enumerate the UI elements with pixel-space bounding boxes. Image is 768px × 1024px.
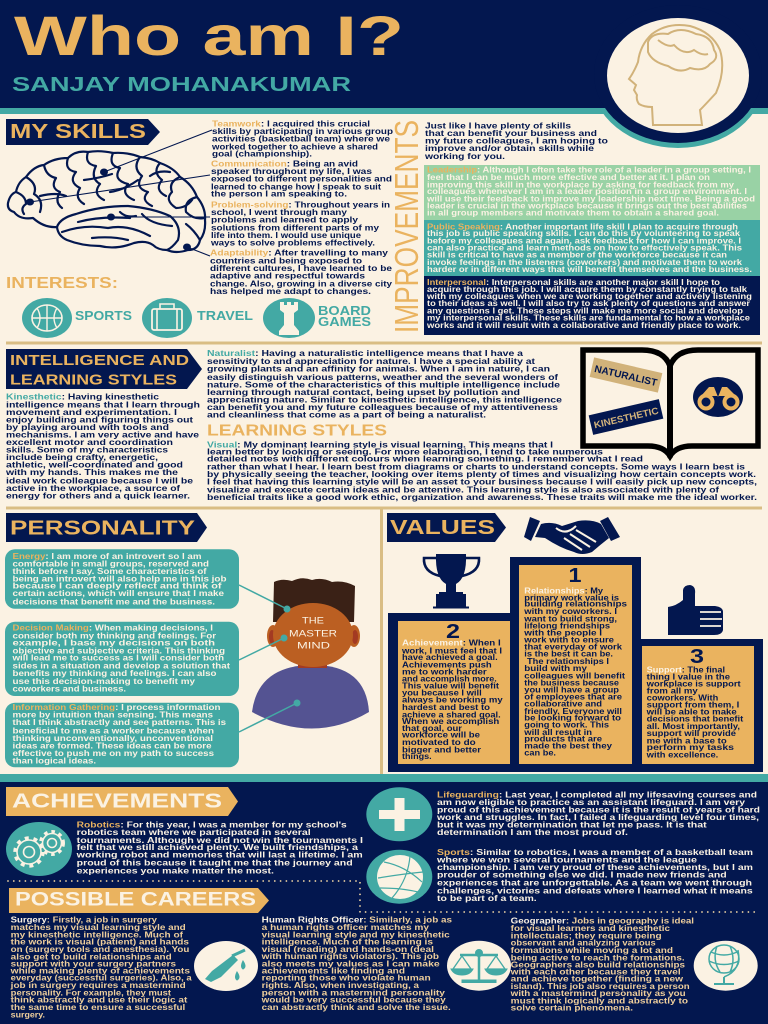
podium: rank 1 relationships: want to build strong,	[523, 615, 617, 624]
subtitle: name: SANJAY MOHANAKUMAR	[12, 74, 352, 96]
text: robotics: tournaments. Although we did not win the tournaments I	[77, 836, 363, 845]
title: Who am I?	[14, 4, 404, 67]
text: sports achievement: championship. I am very proud of these achievements, but I am	[437, 863, 753, 872]
panel: energy: because I can deeply reflect and think of	[12, 582, 222, 591]
icon: plus sign	[366, 787, 432, 841]
banner: intelligence and learning styles	[6, 349, 202, 389]
podium: rank 2 achievement: have achieved a goal.	[402, 653, 498, 662]
text: human rights officer career: rights. Also, when investigating, a	[262, 981, 420, 990]
text: surgery career: while making plenty of achievements	[9, 967, 191, 976]
text: improvements intro: Just like I have plenty of skills	[425, 121, 572, 130]
text: problem-solving skill: school, I went through many	[211, 208, 348, 217]
text: geographer career: Geographers also build relationships	[511, 960, 686, 969]
text: geographer career: solve certain phenomena.	[511, 1004, 633, 1013]
podium: rank 2 achievement: hardest and best to	[402, 703, 490, 712]
panel: interpersonal: any questions I get. These steps will make me more social and develop	[427, 306, 743, 315]
podium: rank 1 relationships: you will have a group	[524, 686, 619, 695]
text: kinesthetic	[5, 392, 200, 500]
panel: public speaking	[424, 220, 760, 276]
text: problem-solving skill: life into them. I would use unique	[211, 231, 362, 240]
text: kinesthetic: by playing around with tools and	[6, 423, 169, 432]
panel: interpersonal: Interpersonal : Interpersonal skills are another major skill I hope to	[427, 278, 720, 287]
text: naturalist: can benefit you and my future colleagues because of my attentiveness	[207, 403, 559, 412]
text: sports achievement: where we won several tournaments and the league	[436, 855, 698, 864]
text: geographer career: being active to reach the formations.	[511, 953, 685, 962]
text: human rights officer career: Human Rights Officer : Similarly, a job as	[262, 915, 453, 924]
panel: information gathering: effective to push me on my path to success	[12, 749, 215, 758]
podium: rank 1 relationships: made the best they	[524, 742, 613, 751]
text: adaptability skill: Adaptability : After travelling to many	[210, 249, 389, 258]
text: robotics: Robotics : For this year, I was a member for my school's	[77, 821, 347, 830]
text: surgery career: my kinesthetic intelligence. Much of	[11, 930, 183, 939]
panel: leadership: will use their feedback to improve my leadership next time. Being a good	[426, 194, 755, 203]
text: geographer career	[509, 916, 694, 1013]
text: visual: beneficial traits like a good work ethic, organization and awareness. These traits will make me the ideal worker.	[207, 493, 757, 502]
podium: rank 1 relationships	[510, 557, 641, 772]
icon: syringe	[194, 941, 258, 991]
podium: rank 3 support: perform my tasks	[647, 743, 735, 752]
podium: rank 1 relationships: of employees that are	[524, 692, 623, 701]
podium: rank 1 relationships: products that are	[524, 735, 603, 744]
podium: rank 3 support: thing I value in the	[647, 672, 731, 681]
podium: rank 2 achievement: work, I must feel that I	[401, 646, 502, 655]
text: improvements intro	[424, 121, 608, 161]
text: improvements intro: working for you.	[424, 152, 505, 161]
label tag: naturalist	[590, 357, 662, 393]
podium: rank 1 relationships: the business because	[524, 679, 620, 688]
interest: board games	[263, 298, 371, 338]
heading: interests: INTERESTS:	[6, 275, 118, 292]
podium: rank 2 achievement: When we accomplish	[402, 717, 499, 726]
panel: interpersonal: my interpersonal skills. These skills are fundamental to how a workplace	[427, 314, 751, 323]
podium: rank 1 relationships: Relationships : My	[524, 586, 604, 595]
banner: intelligence and learning styles: LEARNING STYLES	[10, 371, 177, 388]
label tag: kinesthetic: KINESTHETIC	[593, 406, 660, 431]
banner: values: VALUES	[390, 517, 495, 539]
text: naturalist	[207, 349, 563, 419]
text: visual: visualize and execute certain ideas and be attentive. This learning style is also associated with plenty of	[207, 485, 719, 494]
connector lines to figure	[239, 585, 300, 732]
text: visual: Visual : My dominant learning style is visual learning. This means that I	[207, 440, 553, 449]
text: surgery career: also get to build relationships and	[11, 952, 172, 961]
text: geographer career: formations while moving a lot and	[511, 946, 673, 955]
text: communication skill: Communication : Being an avid	[211, 160, 358, 169]
interest: board games: GAMES	[318, 314, 371, 329]
panel: energy: certain actions, which will ensure that I make	[12, 589, 225, 598]
podium: rank 1 relationships: be looking forward to	[524, 714, 621, 723]
panel: information gathering: than logical ideas.	[12, 756, 96, 765]
bottom navy section	[0, 774, 768, 1024]
brain illustration with pointer lines	[8, 130, 212, 256]
podium: rank 1 relationships: work with to ensure	[523, 636, 615, 645]
podium: rank 1 relationships: will all result in	[523, 728, 592, 737]
podium: rank 1 relationships: build with my	[524, 664, 588, 673]
text: surgery career	[9, 915, 192, 1019]
text: geographer career: for visual learners and kinesthetic	[511, 924, 671, 933]
text: teamwork skill: worked together to achieve a shared	[211, 142, 378, 151]
text: communication skill: exposed to different personalities and	[211, 175, 392, 184]
text: surgery career: Surgery : Firstly, a job in surgery	[11, 915, 158, 924]
panel: energy: being an introvert will also help me in this job	[12, 574, 227, 583]
icon: gears	[6, 822, 72, 876]
interest: sports	[22, 298, 132, 338]
text: surgery career: the work is visual (patient) and hands	[11, 938, 190, 947]
icon: thumbs up	[668, 585, 723, 635]
text: adaptability skill: change. Also, growing in a diverse city	[210, 280, 393, 289]
icon: basketball	[366, 850, 432, 904]
text: problem-solving skill: problems and learned to apply	[211, 216, 359, 225]
text: problem-solving skill: Problem-solving : Throughout years in	[211, 200, 390, 210]
panel: public speaking: Public Speaking : Another important life skill I plan to acquire through	[427, 222, 738, 231]
podium: rank 1 relationships: that everyday of work	[524, 642, 623, 651]
panel: decision making: use this decision-making to benefit my	[12, 677, 196, 686]
text: geographer career: Geographer : Jobs in geography is ideal	[511, 916, 694, 925]
icon: open book with labels	[583, 350, 758, 456]
text: problem-solving skill	[210, 200, 390, 248]
podium: rank 1 relationships: can be.	[524, 749, 556, 758]
banner: achievements	[6, 787, 238, 816]
text: geographer career: intellectuals; they require being	[511, 931, 662, 940]
panel: information gathering: more by intuition than sensing. This means	[12, 711, 214, 720]
illustration: mastermind figure: MASTER	[289, 629, 337, 640]
podium: rank 1 relationships: The relationships I	[527, 657, 609, 666]
text: human rights officer career: achievements like finding and	[262, 967, 405, 976]
panel: leadership: improving this skill in the workplace by asking for feedback from my	[427, 180, 735, 189]
podium: rank 3 support: decisions that benefit	[647, 715, 744, 724]
text: lifeguarding: determination I am the most proud of.	[437, 828, 628, 837]
text: human rights officer career: also meets my values as I can make	[262, 959, 440, 968]
text: naturalist: learning through natural contact, being upset by pollution and	[207, 388, 520, 397]
panel: information gathering: ideas are formed. These ideas can be more	[12, 741, 212, 750]
panel: public speaking: before my colleagues and again, ask feedback for how I can improve. I	[427, 236, 741, 245]
text: sports achievement	[436, 848, 753, 903]
text: human rights officer career: would be very successful because they	[260, 996, 446, 1005]
podium: rank 3 support: Support : The final	[647, 665, 725, 674]
podium: rank 2 achievement: things.	[402, 752, 432, 761]
text: teamwork skill: goal (championship).	[212, 150, 312, 159]
text: visual: detailed notes with different colours when learning something. I remember what I read	[207, 455, 643, 464]
text: naturalist: appreciating nature. Similar to kinesthetic intelligence, this intelligence	[207, 396, 563, 405]
text: communication skill	[211, 160, 392, 199]
podium: rank 1 relationships: is the best it can be.	[524, 650, 613, 659]
text: naturalist: Naturalist : Having a naturalistic intelligence means that I have a	[207, 349, 524, 358]
panel: decision making: coworkers and business.	[12, 685, 126, 694]
podium: rank 2 achievement: Achievement : When I	[402, 639, 501, 648]
panel: decision making: Decision Making : When making decisions, I	[12, 624, 213, 633]
text: geographer career: with each other because they travel	[509, 967, 681, 976]
panel: leadership: feel that I can be much more effective and better at it. I plan on	[427, 173, 710, 182]
text: surgery career: support with your surgery partners	[11, 959, 177, 968]
podium: rank 2 achievement: me to work harder	[402, 667, 487, 676]
text: visual: by physically seeing the teacher, looking over items plenty of times and visualizing how certain concepts work.	[207, 470, 756, 479]
text: human rights officer career: reporting those who violate human	[262, 974, 431, 983]
text: improvements intro: improve and/or obtain skills while	[425, 144, 595, 153]
text: human rights officer career: a human rights officer matches my	[262, 923, 430, 932]
panel: interpersonal: acquire through this job. I will acquire them by constantly trying to talk	[427, 285, 748, 294]
panel: information gathering	[5, 703, 239, 767]
text: lifeguarding: am now eligible to practice as an assistant lifeguard. I am very	[437, 798, 746, 807]
panel: energy	[5, 549, 239, 609]
podium: rank 3 support	[641, 639, 763, 772]
text: adaptability skill	[210, 249, 393, 296]
panel: leadership	[424, 165, 760, 220]
podium: rank 2 achievement: This value will benefit	[402, 681, 499, 690]
text: kinesthetic: excellent motor and coordination	[6, 438, 173, 447]
text: sports achievement: prouder of something else we did. I made new friends and	[437, 871, 727, 880]
text: surgery career: think abstractly and use their logic at	[11, 996, 188, 1005]
illustration: mastermind figure: THE	[302, 615, 324, 626]
text: lifeguarding	[436, 791, 760, 837]
podium: rank 2 achievement: bigger and better	[402, 745, 481, 754]
label tag: kinesthetic	[589, 399, 663, 435]
text: human rights officer career: person with a mastermind personality	[262, 988, 446, 997]
interest: travel	[142, 298, 253, 338]
text: geographer career: island). This job also requires a person	[511, 982, 690, 991]
text: surgery career: surgery.	[11, 1010, 45, 1019]
text: visual: I feel that having this learning style will be an asset to your business because I will easily pick up new concepts,	[207, 477, 757, 486]
podium: rank 1 relationships: with my coworkers. I	[523, 607, 617, 616]
text: naturalist: easily distinguish various patterns, weather and the several wonders of	[207, 373, 558, 382]
text: human rights officer career	[260, 915, 453, 1012]
text: kinesthetic: active in the workplace, a source of	[6, 484, 180, 493]
text: surgery career: matches my visual learning style and	[11, 923, 186, 932]
podium: rank 3 support: with excellence.	[646, 750, 718, 759]
podium: rank 3 support: coworkers. With	[647, 694, 718, 703]
podium: rank 3 support: me with a base to	[647, 736, 727, 745]
podium: rank 2 achievement: you because I will	[402, 689, 482, 698]
icon: binoculars badge	[693, 377, 743, 417]
illustration: mastermind figure: MIND	[297, 641, 330, 652]
banner: intelligence and learning styles: INTELLIGENCE AND	[10, 352, 189, 369]
panel: decision making: example, I base my decisions on both	[12, 639, 215, 648]
text: human rights officer career: with human rights violators). This job	[260, 952, 439, 961]
panel: public speaking: this job is public speaking skills. I can do this by volunteering to speak	[427, 229, 741, 238]
text: naturalist: and cleanliness that come as a part of being a naturalist.	[207, 410, 486, 419]
text: naturalist: sensitivity to and appreciation for nature. I have a special ability at	[207, 357, 535, 366]
text: sports achievement: experiences that are unforgettable. As a team we went through	[437, 879, 752, 888]
banner: personality	[6, 513, 207, 542]
podium: rank 2 achievement: 2	[446, 621, 460, 643]
text: kinesthetic: movement and experimentation. I	[6, 408, 177, 417]
panel: energy: Energy : I am more of an introvert so I am	[12, 552, 202, 561]
panel: interpersonal: with my colleagues when we are working together and actively listening	[426, 292, 752, 301]
podium: rank 1 relationships: going to work. This	[524, 721, 610, 730]
illustration: mastermind figure	[252, 578, 369, 728]
text: sports achievement: Sports : Similar to robotics, I was a member of a basketball team	[437, 848, 753, 857]
text: surgery career: job in surgery requires a mastermind	[9, 981, 186, 990]
text: teamwork skill: Teamwork : I acquired this crucial	[212, 120, 370, 129]
heading: learning styles: LEARNING STYLES	[207, 423, 387, 440]
text: lifeguarding: work and struggles. In fact, I failed a lifeguarding level four times,	[436, 813, 759, 822]
interest: board games: BOARD	[318, 303, 371, 318]
podium: rank 2 achievement: motivated to do	[402, 738, 476, 747]
text: human rights officer career: visual learning style and my kinesthetic	[262, 930, 450, 939]
podium: rank 3 support: 3	[690, 646, 704, 668]
panel: energy: comfortable in small groups, reserved and	[12, 560, 209, 569]
interest: sports: SPORTS	[75, 308, 132, 323]
text: kinesthetic: energy for others and a quick learner.	[6, 491, 190, 500]
panel: public speaking: can also practice and learn methods on how to effectively speak. This	[427, 244, 743, 253]
panel: interpersonal	[424, 276, 760, 335]
podium: rank 3 support: will be able to make	[646, 707, 737, 716]
icon: trophy	[424, 554, 479, 608]
text: teamwork skill: skills by participating in various group	[212, 127, 393, 136]
panel: energy: decisions that benefit me and the business.	[12, 597, 215, 606]
text: adaptability skill: different cultures, I have learned to be	[210, 264, 393, 273]
podium: rank 1 relationships: with the people I	[523, 629, 602, 638]
interest: travel: TRAVEL	[197, 308, 253, 323]
icon: scales of justice	[447, 941, 511, 991]
panel: public speaking: skill is critical to have as a member of the workforce because it can	[427, 250, 727, 259]
text: communication skill: speaker throughout my life, I was	[211, 167, 373, 176]
text: visual	[207, 440, 757, 502]
label tag: naturalist: NATURALIST	[593, 364, 658, 389]
podium: rank 2 achievement: workforce will be	[401, 731, 481, 740]
panel: information gathering: beneficial to me as a worker because when	[12, 726, 214, 735]
text: sports achievement: to be part of a team.	[437, 894, 537, 903]
podium: rank 3 support: from all my	[647, 686, 698, 695]
podium: rank 1 relationships: collaborative and	[524, 700, 602, 709]
header band	[0, 0, 768, 148]
text: kinesthetic: include being crafty, energetic,	[6, 453, 158, 462]
icon: globe	[694, 941, 758, 991]
podium: rank 3 support: workplace is support	[646, 680, 741, 689]
panel: public speaking: harder or in different ways that will benefit themselves and the business.	[427, 265, 752, 274]
podium: rank 2 achievement	[388, 613, 510, 772]
text: kinesthetic: ideal work colleague because I will be	[6, 476, 194, 485]
podium: rank 3 support: support from them, I	[647, 701, 739, 710]
panel: information gathering: that I think abstractly and see patterns. This is	[12, 718, 227, 727]
text: communication skill: the person I am speaking to.	[211, 190, 347, 199]
text: visual: rather than what I hear. I learn best from diagrams or charts to understand concepts. Some ways I learn best is	[207, 462, 746, 471]
podium: rank 1 relationships: lifelong friendships	[524, 621, 611, 630]
text: robotics: working robot and memories that will last a lifetime. I am	[75, 851, 363, 860]
text: kinesthetic: mechanisms. I am very active and have	[6, 430, 200, 439]
text: geographer career: must think logically and abstractly to	[511, 996, 688, 1005]
podium: rank 2 achievement: achieve a shared goal.	[402, 710, 501, 719]
icon: head with brain	[607, 18, 749, 133]
panel: information gathering: Information Gathering : I process information	[12, 703, 221, 712]
text: adaptability skill: countries and being exposed to	[210, 256, 362, 265]
panel: interpersonal: works and it will result with a collaborative and friendly place to work.	[426, 321, 741, 330]
podium: rank 1 relationships: colleagues will benefit	[524, 671, 625, 680]
podium: rank 2 achievement: Achievements push	[402, 660, 492, 669]
text: kinesthetic: Kinesthetic : Having kinesthetic	[6, 392, 160, 401]
text: lifeguarding: proud of this achievement because it is the result of years of hard	[437, 805, 760, 814]
text: lifeguarding: but it was my determination that let me pass. It is that	[437, 821, 707, 830]
text: lifeguarding: Lifeguarding : Last year, I completed all my lifesaving courses and	[437, 791, 757, 800]
podium: rank 1 relationships: primary work value is	[524, 594, 620, 603]
text: improvements intro: my future colleagues, I am hoping to	[425, 136, 608, 145]
text: teamwork skill: activities (basketball team) where we	[212, 134, 391, 143]
heading: improvements (vertical): IMPROVEMENTS	[388, 120, 425, 333]
text: naturalist: nature. Some of the characteristics of this multiple intelligence include	[207, 380, 561, 389]
text: geographer career: and achieve together (finding a new	[511, 975, 684, 984]
text: geographer career: observant and analyzing various	[511, 939, 656, 948]
panel: leadership: in all group members and motivate them to obtain a shared goal.	[427, 209, 719, 218]
text: robotics: experiences you make matter the most.	[77, 866, 274, 875]
text: robotics	[75, 821, 363, 875]
panel: decision making: consider both my thinking and feelings. For	[12, 631, 216, 640]
panel: decision making: sides in a situation and develop a solution that	[12, 662, 230, 671]
text: kinesthetic: intelligence means that I learn through	[6, 400, 200, 409]
text: surgery career: on (surgery tools and anesthesia). You	[11, 945, 189, 954]
panel: decision making: will lead me to success as I will consider both	[11, 654, 224, 663]
text: adaptability skill: has helped me adapt to changes.	[210, 287, 371, 296]
podium: rank 2 achievement: always be working my	[402, 696, 503, 705]
dotted separator	[8, 881, 756, 912]
podium: rank 2 achievement: that goal, our	[402, 724, 462, 733]
text: visual: learn better by looking or seeing. For more elaboration, I tend to take numerous	[207, 447, 604, 456]
banner: achievements: ACHIEVEMENTS	[12, 791, 222, 813]
panel: public speaking: invoke feelings in the listeners (coworkers) and motivate them to work	[427, 258, 743, 267]
podium: rank 3 support: support will provide	[647, 729, 737, 738]
banner: my skills	[6, 119, 160, 145]
panel: leadership: Leadership : Although I often take the role of a leader in a group setting, I	[427, 166, 751, 175]
text: surgery career: the same time to ensure a successful	[11, 1003, 185, 1012]
text: naturalist: growing plants and an affinity for animals. When I am in nature, I can	[207, 365, 550, 374]
text: robotics: robotics team where we participated in several	[77, 828, 311, 837]
text: human rights officer career: can abstractly think and solve the issue.	[262, 1003, 451, 1012]
panel: decision making	[5, 622, 239, 696]
text: surgery career: everyday (successful surgeries). Also, a	[11, 974, 192, 983]
panel: leadership: leader is crucial in the workplace because it brings out the best abilities	[427, 201, 748, 210]
panel: decision making: objective and subjective criteria. This thinking	[12, 646, 225, 655]
banner: possible careers: POSSIBLE CAREERS	[15, 890, 256, 911]
text: kinesthetic: athletic, well-coordinated and good	[6, 461, 183, 470]
panel: decision making: benefits my thinking and feelings. I can also	[12, 669, 217, 678]
panel: information gathering: thinking unconventionally, unconventional	[12, 734, 213, 743]
icon: handshake	[524, 517, 620, 554]
text: robotics: felt that we still achieved plenty. We built friendships, a	[77, 843, 359, 852]
text: surgery career: personality. For example, they must	[11, 988, 171, 997]
panel: interpersonal: to their ideas as well. I will also try to ask plenty of questions and answer	[427, 299, 750, 308]
banner: my skills: MY SKILLS	[10, 121, 146, 143]
text: kinesthetic: skills. Some of my characteristics	[6, 446, 169, 455]
panel: leadership: colleagues whenever I am in a leader position in a group environment. I	[427, 187, 747, 196]
text: adaptability skill: adaptive and respectful towards	[210, 272, 366, 281]
text: communication skill: learned to change how I speak to suit	[211, 182, 381, 191]
panel: energy: think before I say. Some characteristics of	[12, 567, 207, 576]
text: sports achievement: challenges, victories and defeats where I learned what it means	[437, 886, 753, 895]
text: kinesthetic: with my hands. This makes me the	[5, 468, 179, 477]
text: human rights officer career: visual (reading) and hands-on (deal	[262, 945, 434, 954]
banner: values	[387, 513, 506, 542]
text: problem-solving skill: ways to solve problems effectively.	[210, 239, 375, 248]
banner: personality: PERSONALITY	[10, 517, 196, 539]
podium: rank 1 relationships: building relationships	[524, 600, 628, 609]
text: human rights officer career: intelligence. Much of the learning is	[262, 938, 434, 947]
text: geographer career: with a mastermind personality as you	[509, 989, 686, 998]
text: robotics: proud of this because it taught me that the journey and	[77, 859, 353, 868]
text: improvements intro: that can benefit your business and	[425, 129, 597, 138]
podium: rank 3 support: all. Most importantly,	[647, 722, 740, 731]
banner: possible careers	[9, 888, 269, 913]
text: kinesthetic: enjoy building and figuring things out	[6, 415, 193, 424]
podium: rank 2 achievement: and accomplish more.	[402, 674, 497, 683]
text: problem-solving skill: solutions from different parts of my	[211, 224, 380, 233]
podium: rank 1 relationships: 1	[568, 565, 582, 587]
podium: rank 1 relationships: friendly. Everyone will	[524, 707, 622, 716]
text: teamwork skill	[211, 120, 393, 159]
